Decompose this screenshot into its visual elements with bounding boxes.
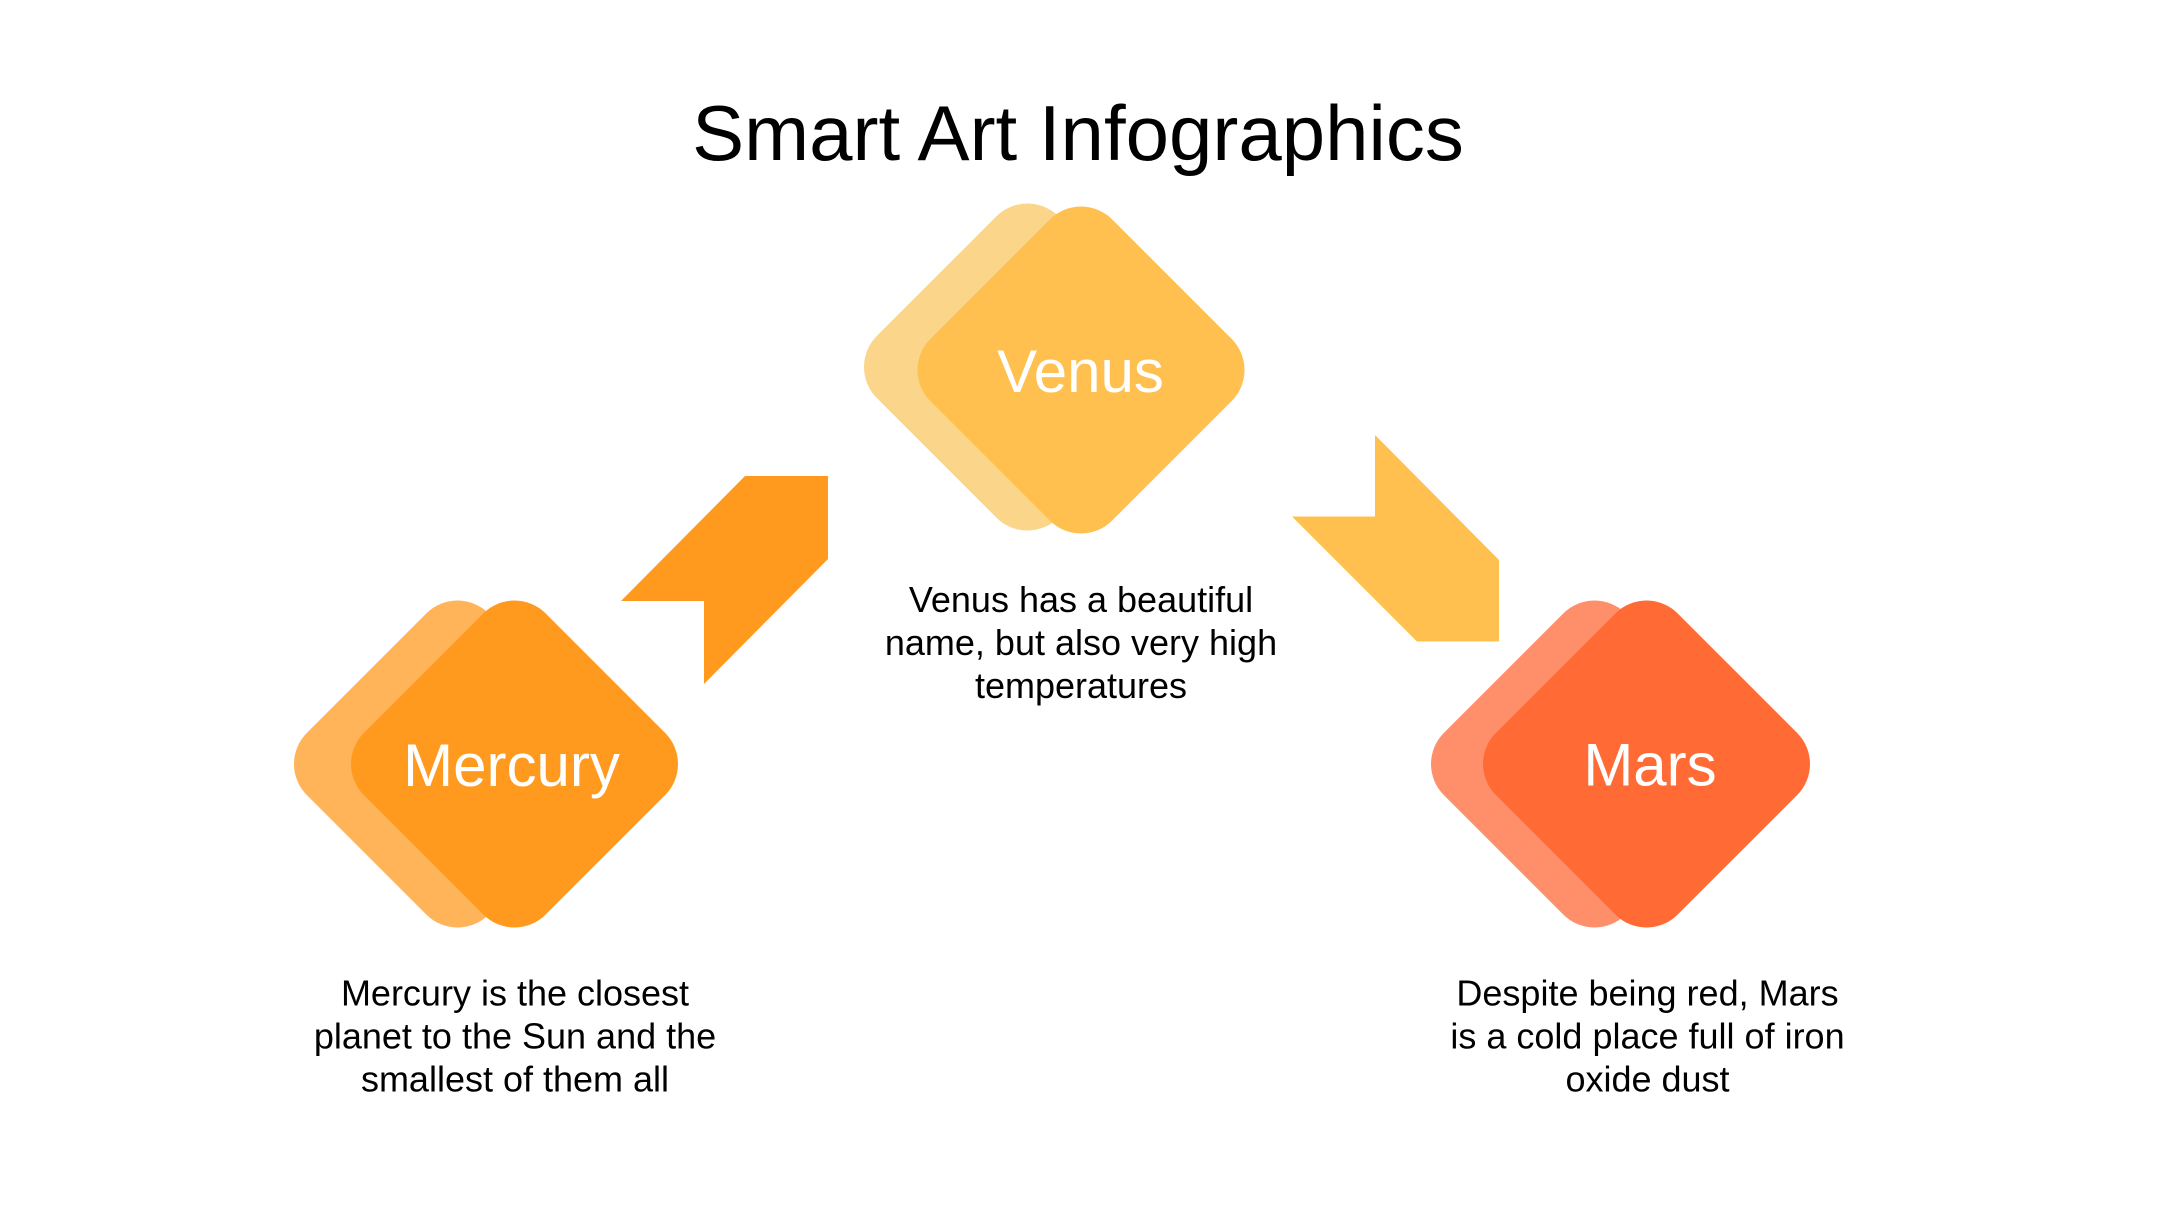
Mercury description: planet to the Sun and the: [314, 1016, 716, 1056]
Mercury label: Mercury: [403, 732, 620, 799]
icon: Mercury front diamond: [333, 582, 696, 946]
Venus description: name, but also very high: [885, 622, 1277, 663]
panel: Mercury: [276, 582, 716, 1100]
arrow: Mercury to Venus: [621, 476, 828, 684]
icon: Mars back diamond: [1413, 582, 1776, 946]
Mercury description: Mercury is the closest: [341, 972, 689, 1014]
Mars description: Despite being red, Mars: [1456, 972, 1839, 1014]
icon: Mercury back diamond: [276, 582, 639, 946]
Mars description: is a cold place full of iron: [1450, 1016, 1845, 1056]
panel: Venus: [846, 185, 1277, 706]
icon: Venus front diamond: [899, 188, 1263, 552]
Venus label: Venus: [997, 338, 1164, 405]
Venus description: Venus has a beautiful: [909, 579, 1253, 620]
Mercury description: smallest of them all: [361, 1058, 669, 1100]
title: Smart Art Infographics: [692, 89, 1464, 177]
icon: Mars front diamond: [1465, 582, 1828, 946]
icon: Venus back diamond: [846, 185, 1209, 549]
arrow: Venus to Mars: [1292, 435, 1499, 642]
panel: Mars: [1413, 582, 1845, 1100]
Venus description: temperatures: [975, 665, 1187, 706]
Mars label: Mars: [1583, 732, 1717, 798]
Mars description: oxide dust: [1565, 1058, 1730, 1100]
